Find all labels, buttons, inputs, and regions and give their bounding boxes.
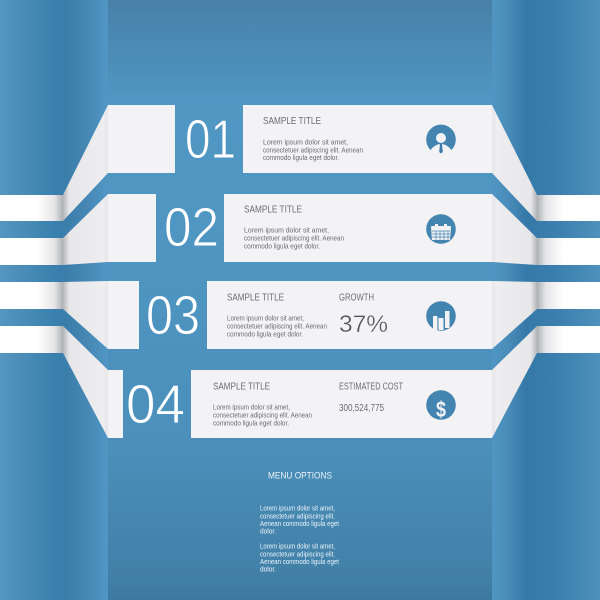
title 4: SAMPLE TITLE — [213, 382, 270, 392]
text block: menu paragraph 1: Aenean commodo ligula eget — [260, 519, 339, 528]
number 01: 01 — [185, 108, 236, 170]
icon: calendar — [426, 214, 456, 244]
body text 3: commodo ligula eget dolor. — [227, 330, 303, 338]
icon: dollar: $ — [436, 397, 446, 422]
text block: menu paragraph 2 — [260, 542, 339, 574]
card 1 — [243, 105, 600, 221]
card 2 — [224, 194, 600, 265]
body text 1 — [263, 138, 363, 162]
panel: band 2 — [0, 194, 600, 265]
card 4 — [191, 326, 600, 438]
left ribbon 3 — [0, 281, 139, 349]
text block: menu paragraph 1: consectetuer adipiscing elit. — [260, 512, 335, 520]
body text 3: Lorem ipsum dolor sit amet, — [227, 314, 304, 322]
body text 3 — [227, 314, 327, 338]
body text 2: Lorem ipsum dolor sit amet, — [244, 226, 329, 234]
left ribbon 2 — [0, 194, 156, 265]
growth label: GROWTH — [339, 292, 374, 304]
body text 4: Lorem ipsum dolor sit amet, — [213, 402, 290, 412]
icon: dollar — [426, 390, 456, 422]
body text 2: commodo ligula eget dolor. — [244, 242, 320, 250]
text block: menu paragraph 2: dolor. — [260, 564, 276, 574]
body text 1: commodo ligula eget dolor. — [263, 153, 339, 162]
number 02: 02 — [164, 196, 219, 258]
card 3 — [207, 281, 600, 349]
icon: bar chart — [426, 301, 456, 331]
heading: menu options: MENU OPTIONS — [268, 470, 332, 482]
estimated cost label: ESTIMATED COST — [339, 382, 403, 392]
body text 4: commodo ligula eget dolor. — [213, 418, 289, 428]
left ribbon 4 — [0, 326, 123, 438]
title 3: SAMPLE TITLE — [227, 292, 284, 304]
panel: band 3 — [0, 281, 600, 349]
body text 1: consectetuer adipiscing elit. Aenean — [263, 146, 363, 154]
title 2: SAMPLE TITLE — [244, 204, 302, 216]
body text 3: consectetuer adipiscing elit. Aenean — [227, 322, 327, 330]
body text 1: Lorem ipsum dolor sit amet, — [263, 138, 348, 146]
text block: menu paragraph 1 — [260, 504, 339, 536]
icon: businessman — [426, 125, 456, 154]
growth value: 37% — [339, 311, 388, 338]
left ribbon 1 — [0, 105, 175, 221]
body text 2 — [244, 226, 344, 250]
number 04: 04 — [126, 373, 185, 435]
body text 4: consectetuer adipiscing elit. Aenean — [213, 410, 312, 420]
text block: menu paragraph 1: dolor. — [260, 526, 276, 536]
number 03: 03 — [146, 284, 200, 346]
body text 2: consectetuer adipiscing elit. Aenean — [244, 234, 344, 242]
panel: band 4 — [0, 326, 600, 438]
text block: menu paragraph 1: Lorem ipsum dolor sit amet, — [260, 504, 335, 512]
cost value: 300,524,775 — [339, 403, 384, 414]
body text 4 — [213, 402, 312, 428]
text block: menu paragraph 2: consectetuer adipiscing elit. — [260, 550, 335, 558]
title 1: SAMPLE TITLE — [263, 116, 321, 127]
text block: menu paragraph 2: Lorem ipsum dolor sit amet, — [260, 542, 335, 550]
panel: band 1 — [0, 105, 600, 221]
text block: menu paragraph 2: Aenean commodo ligula eget — [260, 557, 339, 566]
